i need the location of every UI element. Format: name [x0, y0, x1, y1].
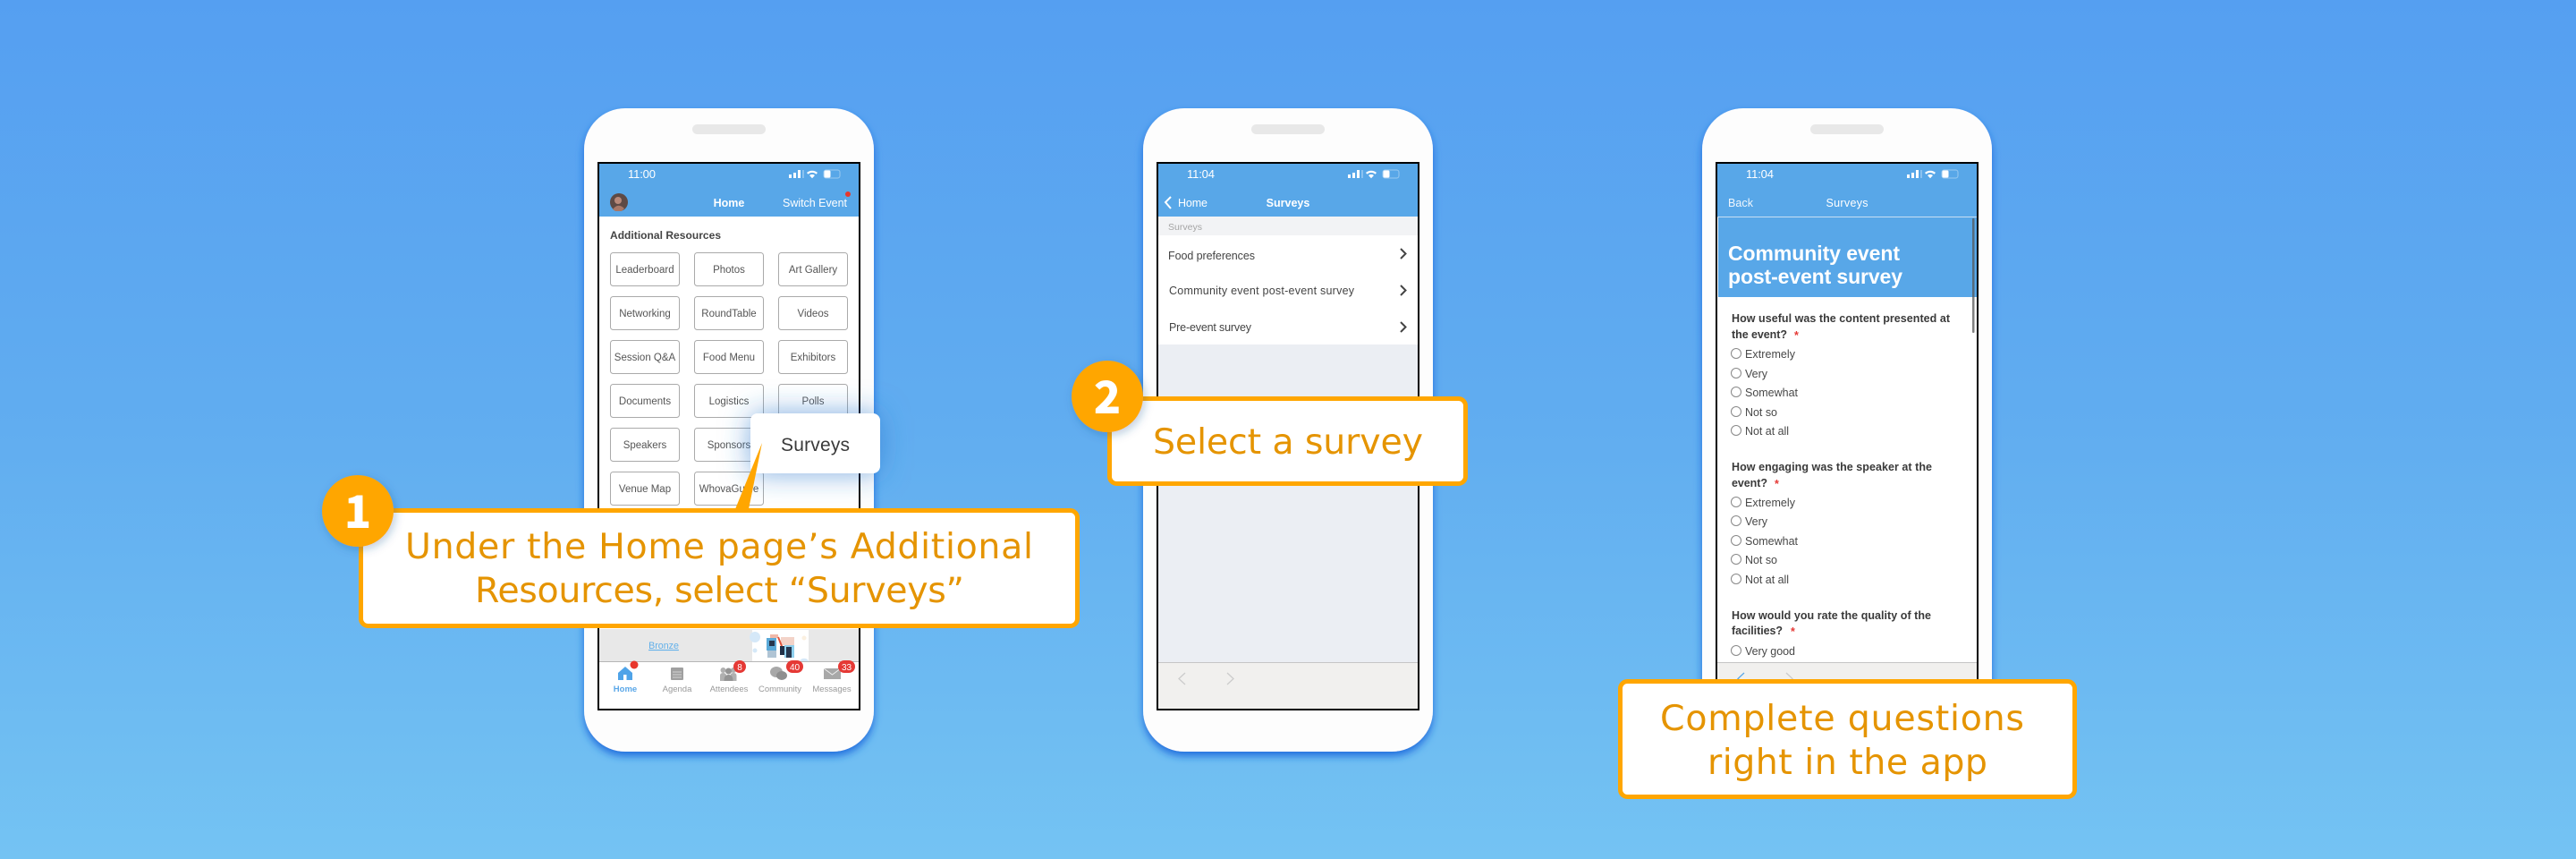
question 2: *	[1775, 478, 1779, 490]
callout 3	[1621, 682, 2075, 796]
tab: community: Community	[758, 685, 801, 694]
phone body	[1143, 108, 1433, 752]
list item: Food preferences	[1168, 250, 1255, 262]
back link: Back	[1728, 197, 1754, 209]
section heading: Additional Resources	[610, 229, 721, 242]
nav title: Surveys	[1826, 197, 1868, 209]
screen	[598, 163, 860, 710]
list section label	[1158, 217, 1418, 235]
tab: home	[614, 660, 639, 694]
tab: attendees: 8	[737, 663, 742, 673]
question 1: *	[1794, 329, 1799, 342]
callout 2	[1109, 399, 1465, 483]
tab: community: 40	[790, 663, 800, 673]
back link: Home	[1178, 197, 1208, 209]
resource buttons: Speakers	[623, 440, 667, 451]
resource buttons: Food Menu	[703, 353, 755, 363]
question 1: the event?	[1732, 328, 1787, 341]
speaker	[1251, 124, 1325, 134]
survey banner: post-event survey	[1728, 265, 1902, 288]
phone body	[584, 108, 874, 752]
speaker	[1810, 124, 1884, 134]
bottom toolbar	[1717, 662, 1977, 709]
sponsor banner: Bronze	[648, 641, 679, 651]
tab: agenda: Agenda	[663, 685, 692, 694]
home indicator	[1242, 709, 1334, 710]
list section label: Surveys	[1168, 222, 1202, 233]
resource buttons: Videos	[798, 309, 829, 319]
status time: 11:04	[1746, 167, 1774, 181]
step badge 2: 2	[1094, 362, 1121, 427]
survey list	[1158, 235, 1418, 344]
question 2: How engaging was the speaker at the	[1732, 461, 1932, 473]
tab: home: Home	[614, 685, 637, 694]
resource buttons: Logistics	[709, 396, 750, 407]
screen	[1157, 163, 1419, 710]
avatar	[610, 193, 628, 211]
tab: attendees	[710, 660, 749, 694]
step badge 2	[1072, 361, 1143, 432]
scrollbar	[1972, 218, 1975, 333]
tab: messages: Messages	[812, 685, 852, 694]
question 1: Not at all	[1745, 425, 1789, 438]
app header	[1717, 164, 1977, 217]
status time: 11:00	[628, 167, 656, 181]
switch event: Switch Event	[783, 197, 848, 209]
status icons	[1348, 170, 1399, 178]
callout 1: Resources, select “Surveys”	[475, 570, 964, 611]
status icons	[1907, 170, 1958, 178]
question 1	[1732, 312, 1951, 438]
survey banner: Community event	[1728, 242, 1900, 265]
resource buttons: Polls	[802, 396, 825, 407]
phone 2: survey list	[1143, 108, 1433, 752]
phone body	[1702, 108, 1992, 752]
question 2: Not at all	[1745, 574, 1789, 586]
screen	[1716, 163, 1978, 710]
bottom tab bar	[614, 660, 855, 694]
tab: messages: 33	[842, 663, 852, 673]
question 3	[1732, 609, 1931, 658]
app header	[599, 164, 859, 217]
question 1: Not so	[1745, 406, 1777, 419]
speaker	[692, 124, 766, 134]
bottom toolbar	[1158, 662, 1418, 709]
question 2: Very	[1745, 515, 1768, 528]
survey banner	[1717, 217, 1977, 297]
step badge 1	[322, 475, 394, 547]
phone 1: home page	[584, 108, 874, 752]
status icons	[789, 170, 840, 178]
resource buttons: Leaderboard	[615, 265, 674, 276]
question 1: How useful was the content presented at	[1732, 312, 1951, 325]
tab: attendees: Attendees	[710, 685, 749, 694]
question 3: facilities?	[1732, 625, 1783, 637]
list item	[1169, 321, 1406, 334]
question 3: Very good	[1745, 645, 1795, 658]
callout 1	[361, 510, 1077, 626]
phone 3: survey questions	[1702, 108, 1992, 752]
question 2: Somewhat	[1745, 535, 1799, 548]
tab: messages	[812, 660, 855, 694]
pointer	[735, 443, 762, 509]
step badge 1: 1	[344, 477, 371, 541]
resource buttons: Documents	[619, 396, 671, 407]
nav title: Surveys	[1267, 197, 1309, 209]
question 1: Somewhat	[1745, 387, 1799, 399]
resource buttons: Exhibitors	[791, 353, 835, 363]
question 1: Extremely	[1745, 348, 1796, 361]
resource buttons: Session Q&A	[614, 353, 676, 363]
popup: surveys button	[750, 413, 880, 473]
resource buttons: Sponsors	[708, 440, 751, 451]
callout 3: right in the app	[1707, 742, 1987, 783]
resource buttons	[610, 252, 848, 505]
question 2: event?	[1732, 477, 1767, 489]
home indicator	[683, 709, 775, 710]
resource buttons: Venue Map	[619, 484, 671, 495]
sponsor banner	[599, 629, 859, 662]
question 3: How would you rate the quality of the	[1732, 609, 1931, 622]
question 1: Very	[1745, 368, 1768, 380]
list item	[1168, 249, 1406, 262]
callout 1: Under the Home page’s Additional	[405, 526, 1033, 567]
resource buttons: Art Gallery	[789, 265, 837, 276]
question 2: Not so	[1745, 554, 1777, 566]
resource buttons: WhovaGuide	[699, 484, 758, 495]
list item: Community event post-event survey	[1169, 285, 1355, 297]
status time: 11:04	[1187, 167, 1215, 181]
resource buttons: RoundTable	[701, 309, 757, 319]
resource buttons: Networking	[619, 309, 671, 319]
nav title: Home	[714, 197, 744, 209]
question 2	[1732, 461, 1932, 586]
resource buttons: Photos	[713, 265, 745, 276]
question 2: Extremely	[1745, 497, 1796, 509]
popup: surveys button: Surveys	[781, 435, 850, 455]
question 3: *	[1791, 625, 1795, 638]
list item: Pre-event survey	[1169, 321, 1252, 334]
callout 3: Complete questions	[1660, 698, 2024, 739]
tab: agenda	[663, 668, 692, 694]
app header	[1158, 164, 1418, 217]
tab: community	[758, 660, 803, 694]
notification dot	[845, 191, 851, 197]
callout 2: Select a survey	[1153, 421, 1423, 463]
